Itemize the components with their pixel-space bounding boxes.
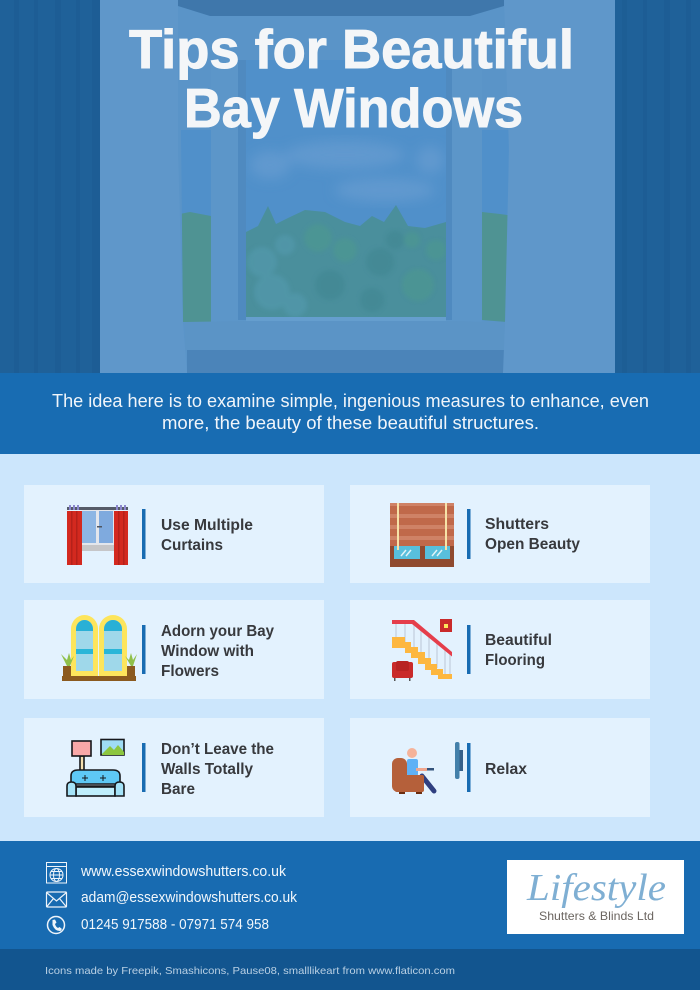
label [161, 623, 274, 680]
hero photo: bay window with curtains [0, 0, 700, 373]
title [129, 18, 574, 139]
label: Relax [485, 761, 527, 778]
logo: Shutters & Blinds Ltd [539, 909, 654, 923]
divider [142, 625, 146, 674]
ceiling [178, 0, 504, 16]
divider [467, 509, 470, 559]
label: Open Beauty [485, 536, 580, 553]
intro band: The idea here is to examine simple, ingenious measures to enhance, even [52, 391, 649, 411]
icon: curtains [67, 505, 128, 565]
phone numbers: 01245 917588 - 07971 574 958 [81, 917, 269, 933]
divider [467, 625, 470, 674]
divider [467, 743, 470, 792]
label [161, 741, 274, 798]
label [485, 632, 552, 669]
card: adorn with flowers [24, 600, 324, 699]
credits bar [0, 949, 700, 990]
icon: arched window with plants [61, 615, 137, 681]
label: Adorn your Bay [161, 623, 274, 640]
dark curtains [0, 0, 100, 373]
label: Flowers [161, 663, 219, 680]
label: Flooring [485, 652, 545, 669]
divider [142, 509, 146, 559]
label: Beautiful [485, 632, 552, 649]
icon: phone [48, 916, 64, 934]
card: relax [350, 718, 650, 817]
label [161, 517, 253, 554]
label: Bare [161, 781, 195, 798]
label: Walls Totally [161, 761, 253, 778]
label: Use Multiple [161, 517, 253, 534]
title: Bay Windows [184, 77, 523, 139]
label [485, 516, 580, 553]
footer contact band [0, 841, 700, 949]
logo: Lifestyle [526, 867, 666, 909]
card: walls not bare [24, 718, 324, 817]
icon: envelope [46, 892, 66, 907]
label: Window with [161, 643, 254, 660]
tips section background [0, 454, 700, 841]
credits bar: Icons made by Freepik, Smashicons, Pause08, smalllikeart from www.flaticon.com [45, 965, 455, 977]
logo [507, 860, 684, 934]
icon: globe [46, 862, 66, 883]
card: shutters [350, 485, 650, 583]
icon: shutters [390, 503, 454, 567]
label: Shutters [485, 516, 549, 533]
card: use multiple curtains [24, 485, 324, 583]
label: Don’t Leave the [161, 741, 274, 758]
window frames [211, 60, 246, 322]
icon: person in armchair watching TV [392, 742, 463, 794]
website: www.essexwindowshutters.co.uk [80, 864, 287, 880]
sheer curtains [98, 0, 187, 373]
icon: staircase [392, 619, 452, 681]
intro band [0, 373, 700, 454]
card: beautiful flooring [350, 600, 650, 699]
intro band: more, the beauty of these beautiful structures. [162, 413, 539, 433]
sill [185, 321, 505, 350]
title: Tips for Beautiful [129, 18, 574, 80]
icon: sofa, lamp and picture [67, 740, 124, 796]
divider [142, 743, 146, 792]
window view [175, 50, 515, 330]
email: adam@essexwindowshutters.co.uk [81, 890, 298, 906]
label: Curtains [161, 537, 223, 554]
